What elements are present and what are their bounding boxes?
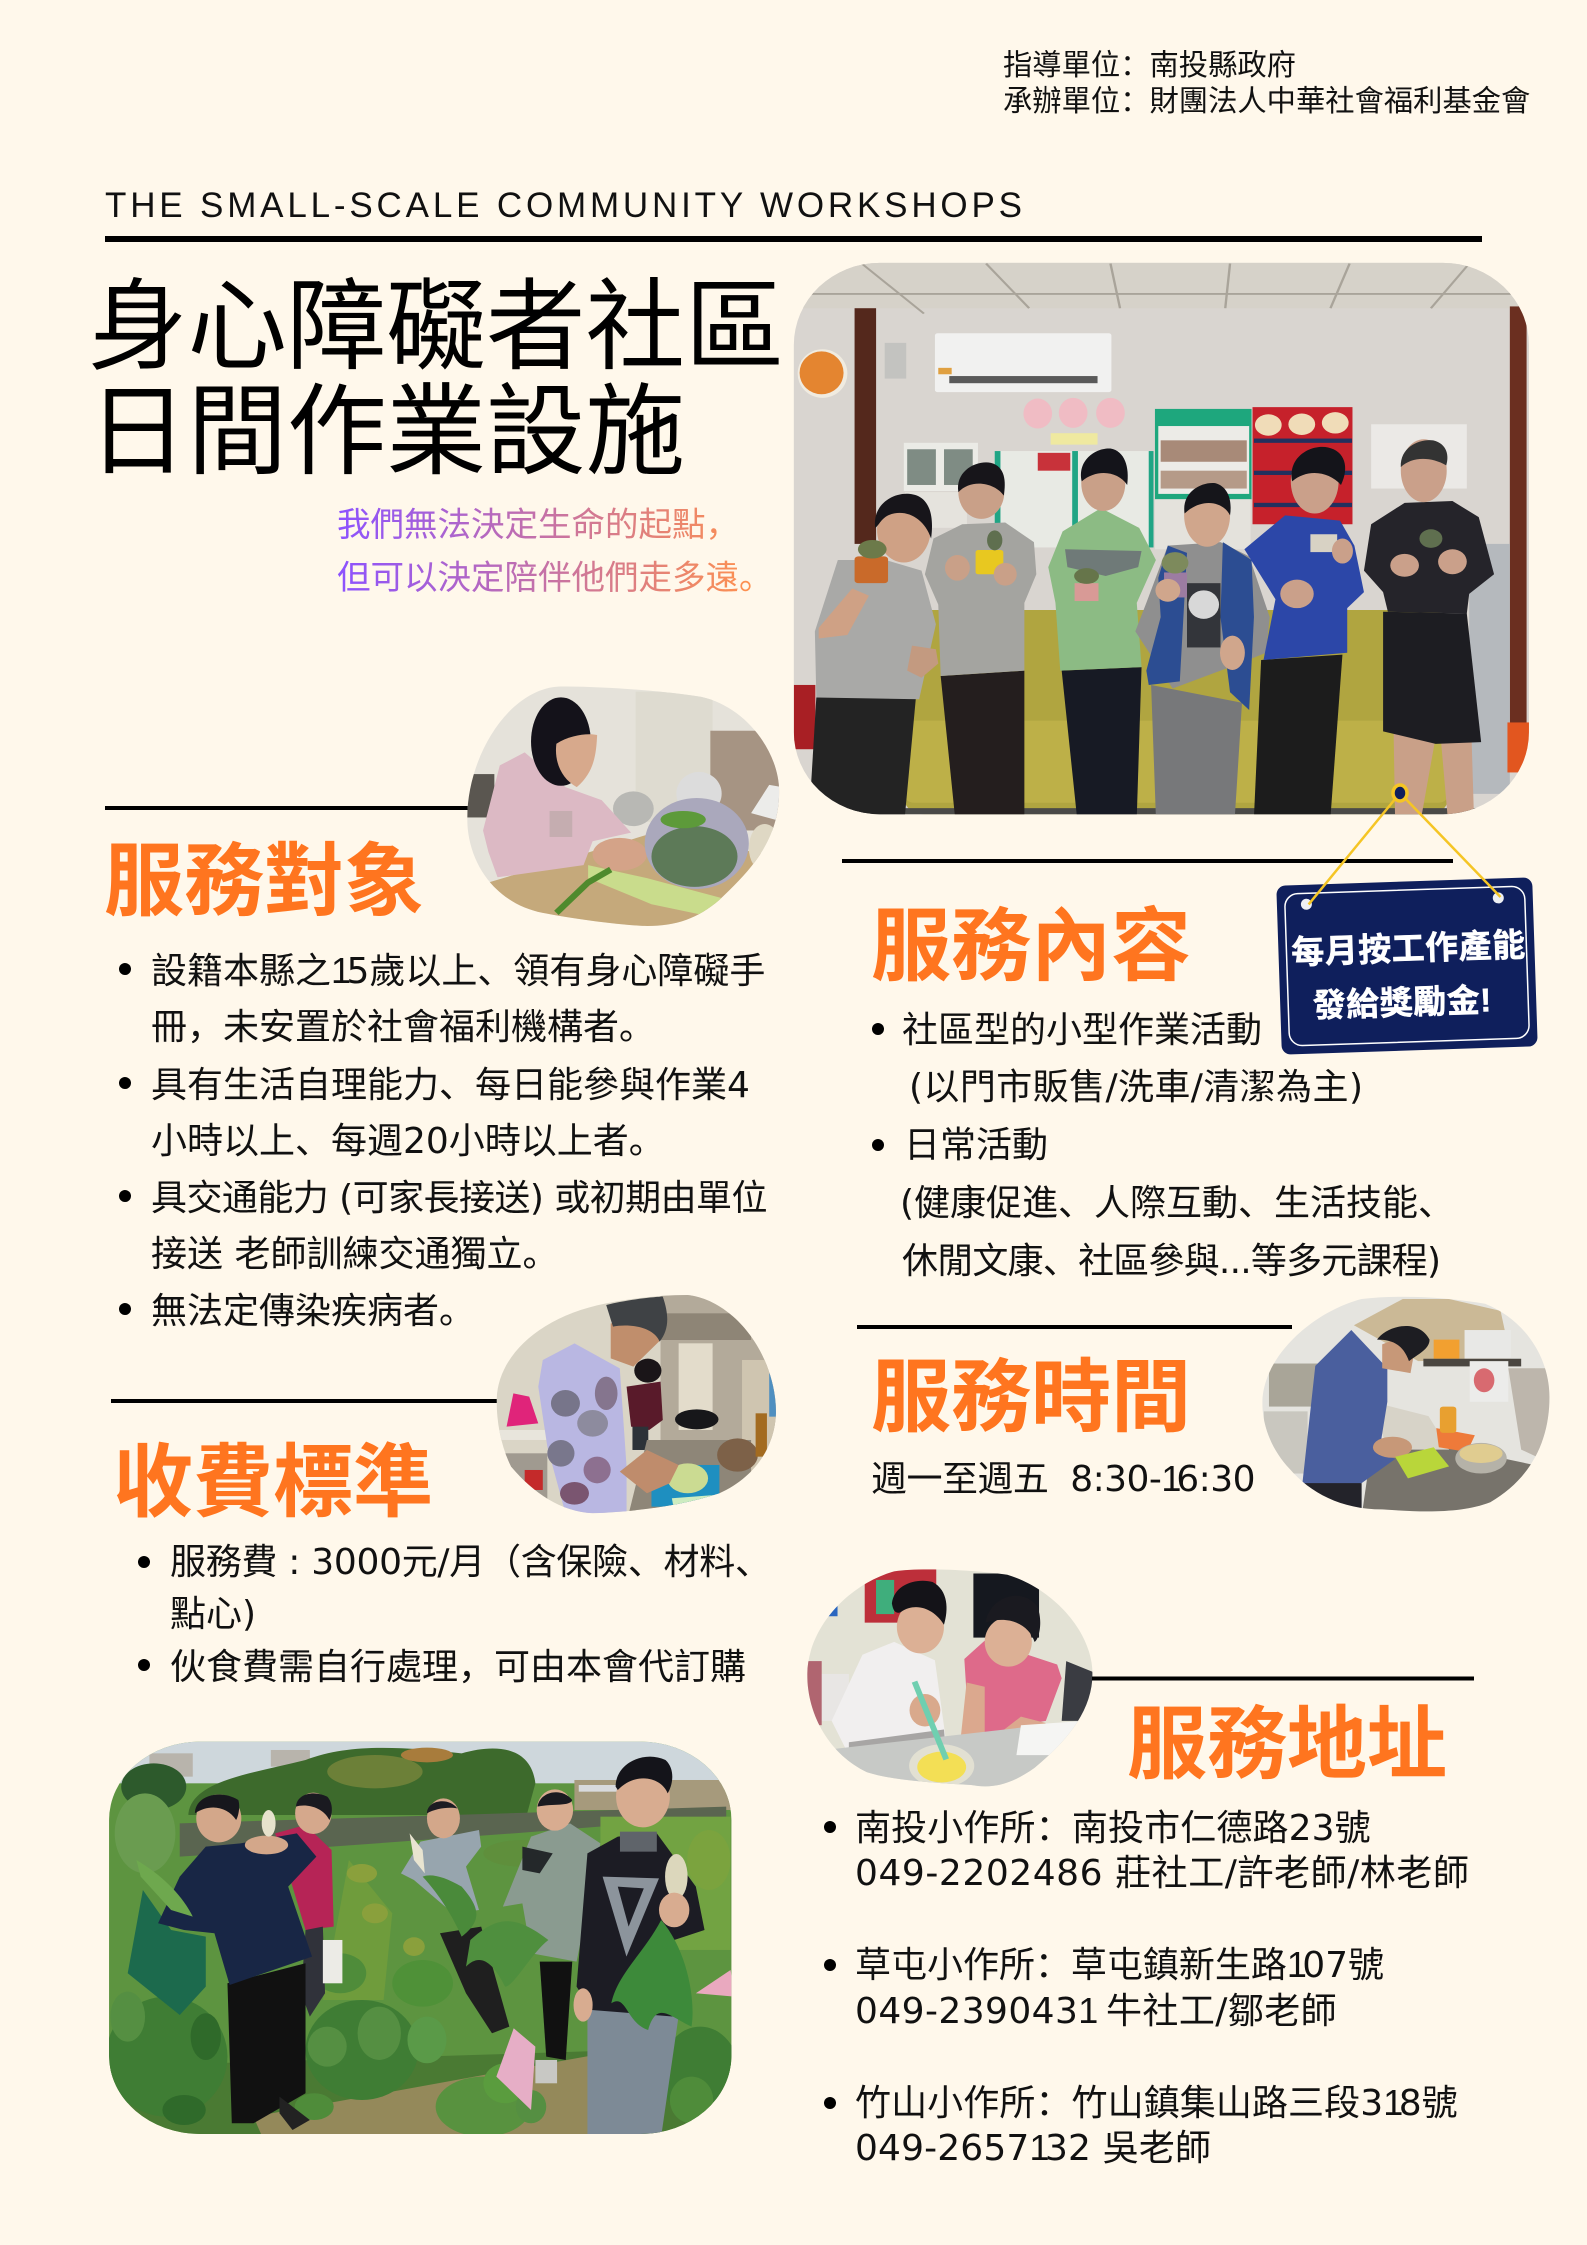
bullet list: 服務內容: 休閒文康、社區參與...等多元課程) [902, 1241, 1441, 1282]
top rule [105, 236, 1482, 242]
person 4: sage coat [466, 1789, 600, 2083]
service hours: 週一至週五 8:30-16:30 [871, 1458, 1256, 1500]
man in patterned shirt [538, 1297, 679, 1517]
bullet list: 服務對象: 具交通能力 (可家長接送) 或初期由單位 [151, 1178, 768, 1219]
address: 草屯: 草屯小作所：草屯鎮新生路107號 [855, 1944, 1384, 1986]
person 6: black top and shorts [1364, 439, 1494, 817]
photo: group in radish field [106, 1740, 739, 2137]
bullet list: 服務內容: 日常活動 [904, 1125, 1048, 1166]
person 5: black sweater with radish [574, 1757, 705, 2137]
heading: 收費標準: 收費標準 [113, 1438, 433, 1527]
bullet list: 服務對象: 接送 老師訓練交通獨立。 [151, 1234, 558, 1275]
address list [824, 1808, 1469, 2169]
address: 南投: 南投小作所：南投市仁德路23號 [855, 1808, 1371, 1849]
address: 竹山: 049-2657132 吳老師 [855, 2127, 1211, 2169]
bullet list: 服務內容 [872, 1010, 1454, 1282]
address: 草屯 [824, 1944, 1384, 2032]
heading: 服務內容: 服務內容 [871, 902, 1191, 991]
bullet list: 服務內容: (健康促進、人際互動、生活技能、 [900, 1183, 1454, 1224]
bullet list: 服務對象 [119, 950, 768, 1332]
gradient tagline: 但可以決定陪伴他們走多遠。 [337, 560, 772, 597]
woman [483, 697, 647, 877]
right person in pink tee [961, 1612, 1062, 1734]
bullet list: 收費標準: 服務費 : 3000元/月（含保險、材料、 [170, 1542, 771, 1583]
gradient tagline: 我們無法決定生命的起點， [337, 507, 739, 544]
sofa [905, 610, 1448, 814]
person 2: grey sweater [925, 462, 1036, 817]
bullet list: 服務對象: 具有生活自理能力、每日能參與作業4 [151, 1065, 750, 1106]
organizer credits: 承辦單位：財團法人中華社會福利基金會 [1003, 85, 1530, 118]
bullet list: 收費標準: 點心) [170, 1594, 256, 1635]
person 4: blue vest [1135, 483, 1270, 817]
photo: man washing vegetables in kitchen [1262, 1296, 1550, 1512]
heading: 服務時間: 服務時間 [871, 1353, 1191, 1442]
section rule: 服務地址 [1092, 1676, 1474, 1680]
address: 竹山 [824, 2082, 1458, 2169]
bullet list: 服務對象: 無法定傳染疾病者。 [151, 1291, 475, 1332]
english subtitle: THE SMALL-SCALE COMMUNITY WORKSHOPS [105, 186, 1022, 225]
address: 南投 [824, 1808, 1469, 1894]
section rule: 服務內容 [842, 859, 1453, 863]
person 1: navy jacket with green bag [128, 1794, 316, 2130]
bullet list: 服務對象: 小時以上、每週20小時以上者。 [151, 1121, 665, 1162]
left person in white sweater [832, 1581, 947, 1757]
cook [1300, 1326, 1430, 1517]
hanging sign with hook and strings: 每月按工作產能 [1291, 926, 1526, 971]
main title: 日間作業設施 [88, 377, 685, 488]
heading: 服務對象: 服務對象 [104, 837, 424, 926]
bullet list: 服務內容: (以門市販售/洗車/清潔為主) [909, 1067, 1363, 1108]
bullet list: 服務對象: 設籍本縣之15歲以上、領有身心障礙手 [151, 950, 765, 992]
bullet list: 收費標準 [138, 1542, 771, 1688]
person 2: pink jacket [275, 1793, 342, 2017]
gradient tagline [337, 507, 772, 597]
person 3: green fleece [1048, 448, 1156, 817]
photo: group holding cactus pots [790, 260, 1540, 820]
produce bag [645, 798, 749, 889]
person 1: grey tee [809, 494, 938, 817]
leaves and rapeseed flowers [110, 1830, 735, 2125]
hanging sign with hook and strings [1276, 785, 1538, 1055]
main title: 身心障礙者社區 [88, 272, 784, 383]
person 3: grey hoodie [401, 1798, 509, 2033]
child in background [627, 1359, 663, 1450]
section rule: 收費標準 [111, 1399, 499, 1403]
hanging sign with hook and strings: 發給獎勵金! [1312, 981, 1492, 1024]
address: 草屯: 049-2390431 牛社工/鄒老師 [855, 1990, 1337, 2032]
section rule: 服務時間 [857, 1325, 1292, 1329]
photo: man cutting cabbage [496, 1295, 776, 1514]
main title [88, 272, 784, 488]
organizer credits: 指導單位：南投縣政府 [1003, 49, 1296, 82]
photo: two people mixing batter [807, 1569, 1092, 1786]
address: 竹山: 竹山小作所：竹山鎮集山路三段318號 [855, 2082, 1458, 2124]
person 5: blue sweatshirt [1244, 447, 1364, 817]
bullet list: 服務對象: 冊，未安置於社會福利機構者。 [151, 1007, 655, 1048]
address: 南投: 049-2202486 莊社工/許老師/林老師 [855, 1853, 1469, 1894]
organizer credits [1003, 49, 1530, 118]
bullet list: 收費標準: 伙食費需自行處理，可由本會代訂購 [170, 1647, 746, 1688]
heading: 服務地址: 服務地址 [1127, 1700, 1447, 1789]
photo: woman sorting vegetables [467, 686, 780, 926]
section rule: 服務對象 [105, 806, 470, 810]
bullet list: 服務內容: 社區型的小型作業活動 [902, 1010, 1262, 1051]
